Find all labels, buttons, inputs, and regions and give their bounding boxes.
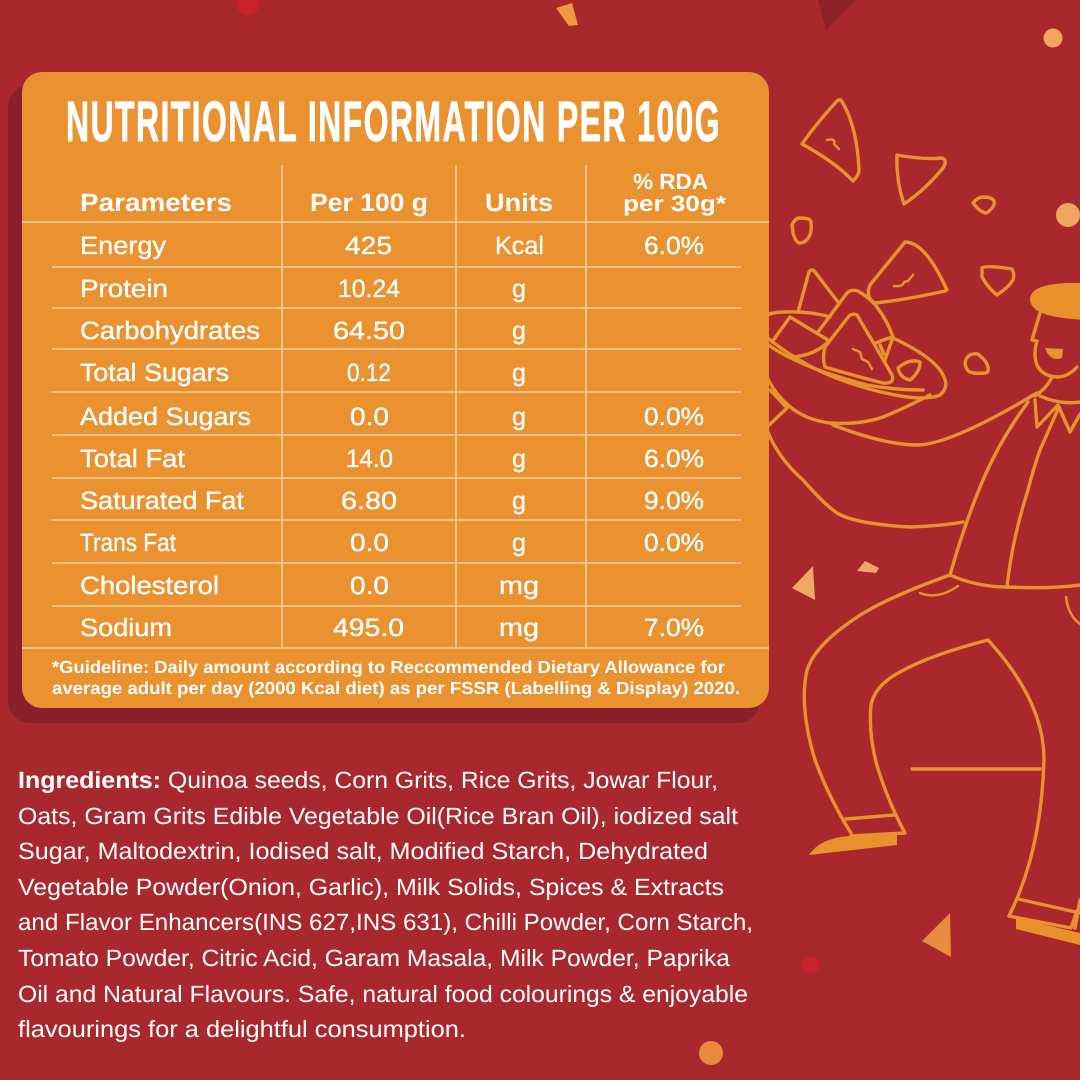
row: cholesterol bbox=[80, 572, 539, 600]
ingredients text block bbox=[18, 767, 753, 1042]
row: saturated fat: g bbox=[512, 487, 526, 515]
row: trans fat: g bbox=[512, 529, 526, 557]
row: carbohydrates bbox=[80, 317, 526, 345]
ingredients text block: and Flavor Enhancers(INS 627,INS 631), Chilli Powder, Corn Starch, bbox=[18, 909, 753, 935]
ingredients text block: Ingredients: bbox=[18, 767, 161, 793]
table header row bbox=[80, 169, 727, 217]
row: trans fat: 0.0% bbox=[644, 529, 704, 557]
row: total fat: Total Fat bbox=[80, 445, 185, 473]
guideline footnote: average adult per day (2000 Kcal diet) as per FSSR (Labelling & Display) 2020. bbox=[52, 678, 740, 698]
panel: nutrition table bbox=[22, 72, 769, 708]
table header row: % RDA bbox=[633, 169, 708, 194]
row: sodium: mg bbox=[499, 614, 539, 642]
panel shadow bbox=[8, 85, 760, 723]
row: trans fat bbox=[80, 529, 704, 557]
confetti shapes bbox=[236, 0, 1080, 1065]
ingredients text block: Tomato Powder, Citric Acid, Garam Masala, Milk Powder, Paprika bbox=[18, 945, 731, 971]
illustration: man's legs and shoes bbox=[804, 575, 1080, 945]
ingredients text block: Quinoa seeds, Corn Grits, Rice Grits, Jowar Flour, bbox=[168, 767, 718, 793]
row: total sugars: g bbox=[512, 359, 526, 387]
row: saturated fat: Saturated Fat bbox=[80, 487, 244, 515]
ingredients text block: Oil and Natural Flavours. Safe, natural food colourings & enjoyable bbox=[18, 981, 748, 1007]
table rows bbox=[80, 232, 704, 642]
row: total fat bbox=[80, 445, 704, 473]
row: added sugars: 0.0 bbox=[350, 403, 389, 431]
row: trans fat: Trans Fat bbox=[80, 529, 176, 557]
guideline footnote bbox=[52, 657, 740, 698]
row: energy: Energy bbox=[80, 232, 167, 260]
ingredients text block: flavourings for a delightful consumption. bbox=[18, 1016, 466, 1042]
row: carbohydrates: Carbohydrates bbox=[80, 317, 260, 345]
table header row: Units bbox=[485, 189, 553, 217]
illustration: bowl of chips and hand bbox=[753, 270, 1037, 445]
row: trans fat: 0.0 bbox=[350, 529, 389, 557]
row: energy: 6.0% bbox=[644, 232, 704, 260]
row: sodium: Sodium bbox=[80, 614, 172, 642]
guideline footnote: *Guideline: Daily amount according to Reccommended Dietary Allowance for bbox=[52, 657, 725, 677]
row: energy bbox=[80, 232, 704, 260]
row: protein: g bbox=[512, 275, 526, 303]
row: protein: 10.24 bbox=[338, 275, 400, 303]
row: total fat: 6.0% bbox=[644, 445, 704, 473]
row: saturated fat bbox=[80, 487, 704, 515]
row: total sugars: 0.12 bbox=[347, 359, 391, 387]
row: total fat: g bbox=[512, 445, 526, 473]
table header row: Per 100 g bbox=[310, 189, 428, 217]
row: cholesterol: Cholesterol bbox=[80, 572, 219, 600]
row: added sugars: 0.0% bbox=[644, 403, 704, 431]
row: energy: 425 bbox=[345, 232, 392, 260]
ingredients text block: Sugar, Maltodextrin, Iodised salt, Modified Starch, Dehydrated bbox=[18, 838, 708, 864]
row: carbohydrates: g bbox=[512, 317, 526, 345]
row: saturated fat: 6.80 bbox=[341, 487, 397, 515]
ingredients text block: Oats, Gram Grits Edible Vegetable Oil(Rice Bran Oil), iodized salt bbox=[18, 803, 738, 829]
row: energy: Kcal bbox=[495, 232, 544, 260]
row: sodium bbox=[80, 614, 704, 642]
row: protein: Protein bbox=[80, 275, 168, 303]
row: saturated fat: 9.0% bbox=[644, 487, 704, 515]
row: sodium: 495.0 bbox=[333, 614, 404, 642]
row: total sugars bbox=[80, 359, 526, 387]
row: protein bbox=[80, 275, 526, 303]
row: added sugars: Added Sugars bbox=[80, 403, 251, 431]
row: sodium: 7.0% bbox=[644, 614, 704, 642]
row: total sugars: Total Sugars bbox=[80, 359, 229, 387]
table grid bbox=[22, 165, 769, 648]
table header row: per 30g* bbox=[623, 191, 727, 216]
illustration: man's head and torso bbox=[767, 283, 1080, 624]
table header row: Parameters bbox=[80, 189, 232, 217]
row: added sugars: g bbox=[512, 403, 526, 431]
row: carbohydrates: 64.50 bbox=[333, 317, 405, 345]
row: total fat: 14.0 bbox=[346, 445, 393, 473]
row: cholesterol: mg bbox=[499, 572, 539, 600]
icon: flying snack chips bbox=[792, 100, 1014, 373]
row: added sugars bbox=[80, 403, 704, 431]
ingredients text block: Vegetable Powder(Onion, Garlic), Milk Solids, Spices & Extracts bbox=[18, 874, 724, 900]
row: cholesterol: 0.0 bbox=[350, 572, 389, 600]
